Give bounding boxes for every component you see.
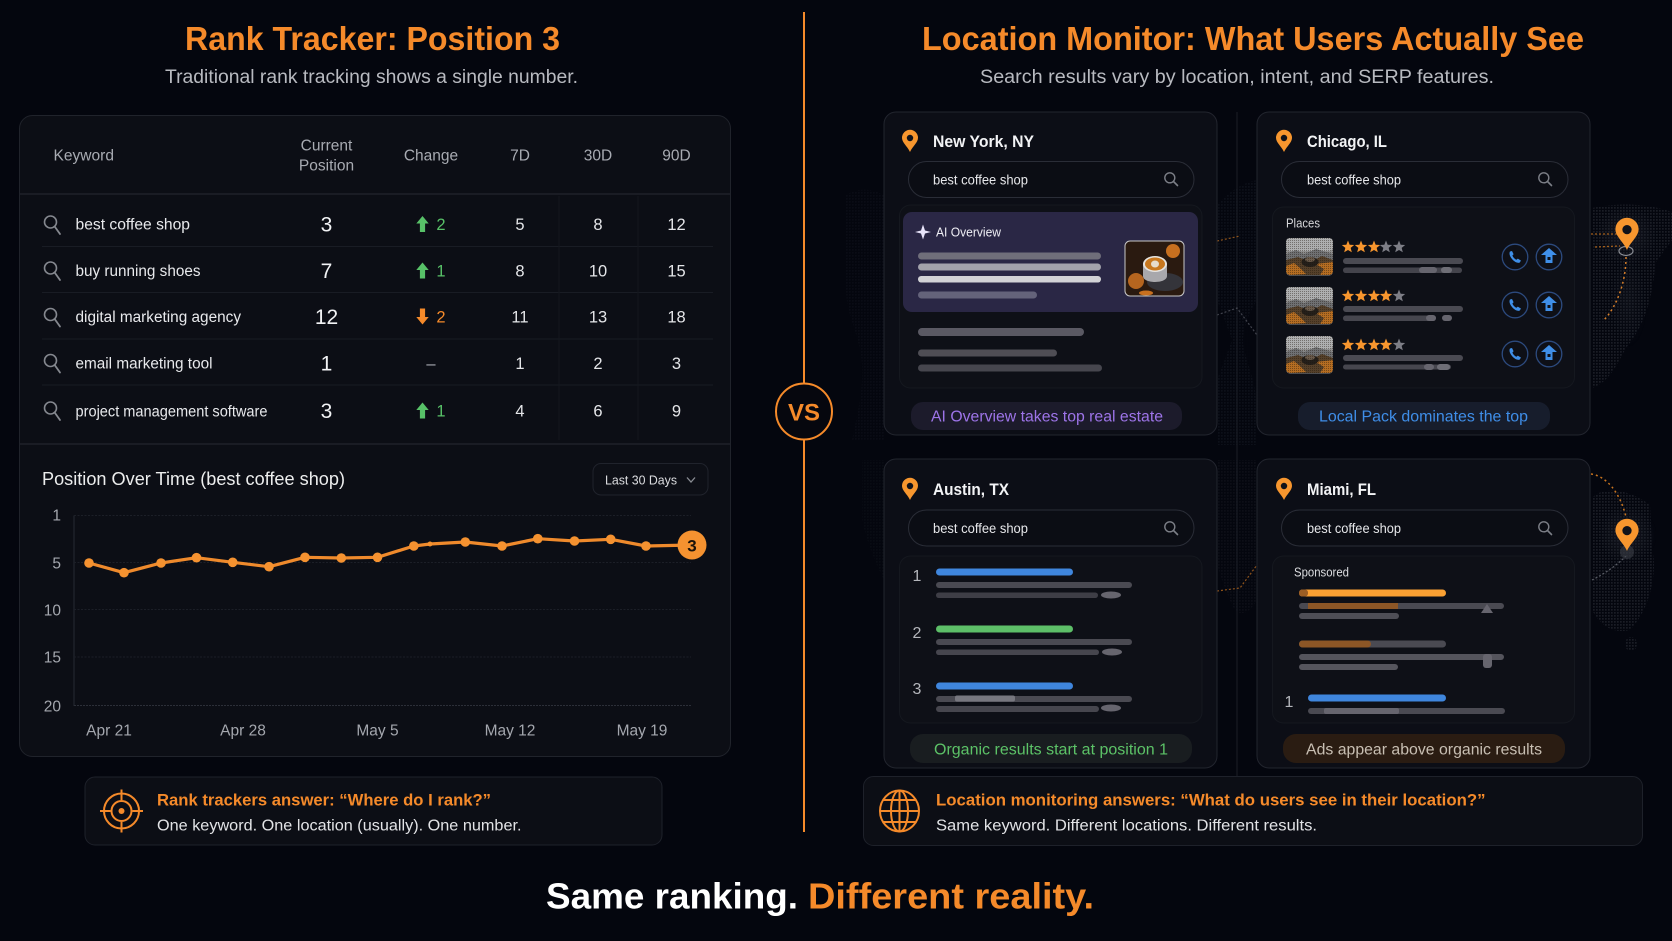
callout text: Location monitoring answers: “What do users see in their location?”: [936, 792, 1486, 810]
versus divider: VS: [788, 400, 820, 426]
table row: best coffee shop: 2: [436, 216, 446, 234]
local pack panel: [1272, 207, 1574, 388]
table row: best coffee shop: 5: [515, 216, 525, 234]
table row: buy running shoes: 7: [321, 260, 332, 283]
search bar: best coffee shop: [933, 521, 1028, 536]
search bar: [908, 510, 1194, 546]
table row: digital marketing agency: [44, 306, 686, 329]
icon: globe: [880, 790, 919, 832]
table row: project management software: 9: [672, 402, 681, 420]
table row: buy running shoes: 1: [436, 262, 446, 280]
heading: rank tracker: Rank Tracker: Position 3: [185, 20, 560, 57]
organic result 2: [913, 625, 1132, 656]
table row: email marketing tool: 3: [672, 355, 681, 373]
sponsored label: Sponsored: [1294, 566, 1349, 580]
organic result 1: [913, 568, 1132, 598]
table row: digital marketing agency: 2: [436, 308, 446, 326]
organic result 1 below ads: 1: [1285, 694, 1294, 711]
callout: rank trackers: [85, 777, 662, 845]
badge: AI overview: [911, 402, 1182, 430]
table row: project management software: 1: [436, 402, 446, 420]
organic result 1: 1: [913, 568, 922, 585]
callout text: Same keyword. Different locations. Different results.: [936, 818, 1317, 834]
line chart: position over time: [44, 508, 706, 740]
table row: email marketing tool: 1: [321, 352, 332, 376]
organic result 2: 2: [913, 625, 922, 642]
search bar: best coffee shop: [1307, 172, 1401, 188]
organic result 3: 3: [913, 681, 922, 698]
badge: local pack: [1298, 402, 1550, 430]
line chart: position over time: 10: [44, 602, 61, 620]
search bar: [908, 162, 1194, 198]
table row: email marketing tool: –: [426, 355, 436, 373]
badge: AI overview: AI Overview takes top real estate: [931, 408, 1163, 426]
table row: digital marketing agency: digital marketing agency: [76, 309, 241, 326]
table row: best coffee shop: [44, 214, 686, 236]
table row: best coffee shop: 12: [667, 216, 686, 234]
table row: digital marketing agency: 13: [589, 308, 607, 326]
panel: rank table and chart: [20, 116, 730, 756]
card: Chicago: [1257, 112, 1590, 435]
icon: location pin: [1276, 478, 1292, 500]
badge: ads: [1283, 734, 1565, 763]
placeholder result lines: [918, 328, 1102, 372]
conclusion headline: Same ranking.: [546, 876, 798, 916]
table row: buy running shoes: 15: [667, 262, 686, 280]
organic result 1 below ads: [1285, 694, 1505, 714]
place listing 1: [1286, 238, 1562, 276]
icon: location pin: [902, 130, 918, 152]
search bar: [1282, 162, 1568, 198]
table row: email marketing tool: 2: [593, 355, 603, 373]
table header: Current: [301, 138, 353, 154]
table header: 90D: [662, 148, 691, 164]
subheading: location monitor: Search results vary by location, intent, and SERP features.: [980, 67, 1494, 88]
table header: Keyword: [54, 148, 114, 164]
line chart: position over time: May 19: [617, 722, 667, 740]
heading: location monitor: Location Monitor: What Users Actually See: [922, 20, 1584, 57]
places label: Places: [1286, 216, 1320, 230]
table row: project management software: project management software: [76, 404, 268, 420]
conclusion headline: [546, 876, 1094, 916]
line chart: position over time: 3: [687, 536, 697, 556]
icon: target: [100, 790, 143, 832]
badge: ads: Ads appear above organic results: [1306, 742, 1542, 758]
line chart: position over time: 15: [44, 650, 61, 666]
line chart: position over time: 20: [44, 698, 61, 716]
date range dropdown: [593, 464, 708, 495]
date range dropdown: Last 30 Days: [605, 472, 677, 488]
callout text: One keyword. One location (usually). One number.: [157, 818, 522, 834]
subheading: rank tracker: Traditional rank tracking shows a single number.: [165, 67, 578, 88]
table header: 30D: [584, 148, 612, 164]
table row: buy running shoes: buy running shoes: [76, 263, 201, 280]
AI overview box: [903, 212, 1198, 312]
conclusion headline: Different reality.: [808, 876, 1094, 916]
table row: buy running shoes: 10: [589, 262, 607, 280]
card: Austin: [884, 459, 1217, 768]
icon: location pin: [902, 478, 918, 500]
table row: digital marketing agency: 12: [315, 306, 338, 329]
badge: organic: [910, 734, 1192, 763]
city name: New York, NY: [933, 133, 1034, 151]
organic results panel: [900, 556, 1202, 723]
city name: Miami, FL: [1307, 481, 1376, 499]
search bar: best coffee shop: [933, 172, 1028, 188]
table row: email marketing tool: 1: [515, 355, 525, 373]
line chart: position over time: Apr 28: [220, 722, 266, 740]
line chart: position over time: May 12: [485, 722, 535, 740]
search bar: best coffee shop: [1307, 521, 1401, 536]
table row: email marketing tool: [44, 352, 681, 376]
coffee thumbnail: [1125, 241, 1184, 296]
table row: project management software: 6: [593, 402, 603, 420]
table row: email marketing tool: email marketing tool: [76, 356, 212, 372]
sponsored result 1: [1299, 590, 1504, 619]
table row: buy running shoes: 8: [515, 262, 525, 280]
badge: organic: Organic results start at position 1: [934, 742, 1168, 758]
table row: project management software: 4: [515, 402, 525, 420]
map pin: right side upper with route: [1591, 218, 1639, 320]
callout: location monitoring: [864, 776, 1642, 846]
organic result 3: [913, 681, 1132, 712]
search bar: [1282, 510, 1568, 546]
table header: Position: [299, 158, 354, 174]
line chart: position over time: 5: [52, 556, 61, 572]
callout text: [157, 792, 522, 834]
place listing 2: [1286, 287, 1562, 324]
table header: [54, 138, 691, 174]
table row: project management software: 3: [321, 400, 332, 423]
table row: best coffee shop: 3: [321, 214, 332, 236]
line chart: position over time: May 5: [356, 722, 399, 740]
badge: local pack: Local Pack dominates the top: [1319, 408, 1528, 426]
table row: buy running shoes: [44, 260, 686, 283]
callout text: Rank trackers answer: “Where do I rank?”: [157, 792, 491, 810]
versus divider: [776, 12, 832, 832]
chart title: Position Over Time (best coffee shop): [42, 469, 345, 489]
line chart: position over time: 1: [52, 508, 61, 524]
line chart: position over time: Apr 21: [86, 722, 132, 740]
table row: best coffee shop: 8: [593, 216, 603, 234]
card: New York: [884, 112, 1217, 435]
table row: digital marketing agency: 11: [511, 308, 529, 326]
place listing 3: [1286, 336, 1562, 374]
city name: Austin, TX: [933, 481, 1009, 499]
ads and results panel: [1272, 556, 1574, 723]
table header: 7D: [510, 148, 530, 164]
table row: digital marketing agency: 18: [667, 308, 686, 326]
route fragments between cards: [1217, 236, 1257, 591]
AI overview box: AI Overview: [936, 224, 1002, 240]
table row: project management software: [44, 400, 681, 423]
table row: best coffee shop: best coffee shop: [76, 216, 190, 234]
callout text: [936, 792, 1486, 834]
sponsored result 2: [1299, 640, 1504, 670]
icon: location pin: [1276, 130, 1292, 152]
table header: Change: [404, 148, 458, 164]
background: dotted world map: [846, 180, 1672, 651]
results panel: [900, 205, 1202, 388]
card: Miami: [1257, 459, 1590, 768]
faint column divider: [1236, 112, 1238, 776]
map pin: right side lower with route: [1591, 474, 1639, 580]
city name: Chicago, IL: [1307, 133, 1387, 151]
